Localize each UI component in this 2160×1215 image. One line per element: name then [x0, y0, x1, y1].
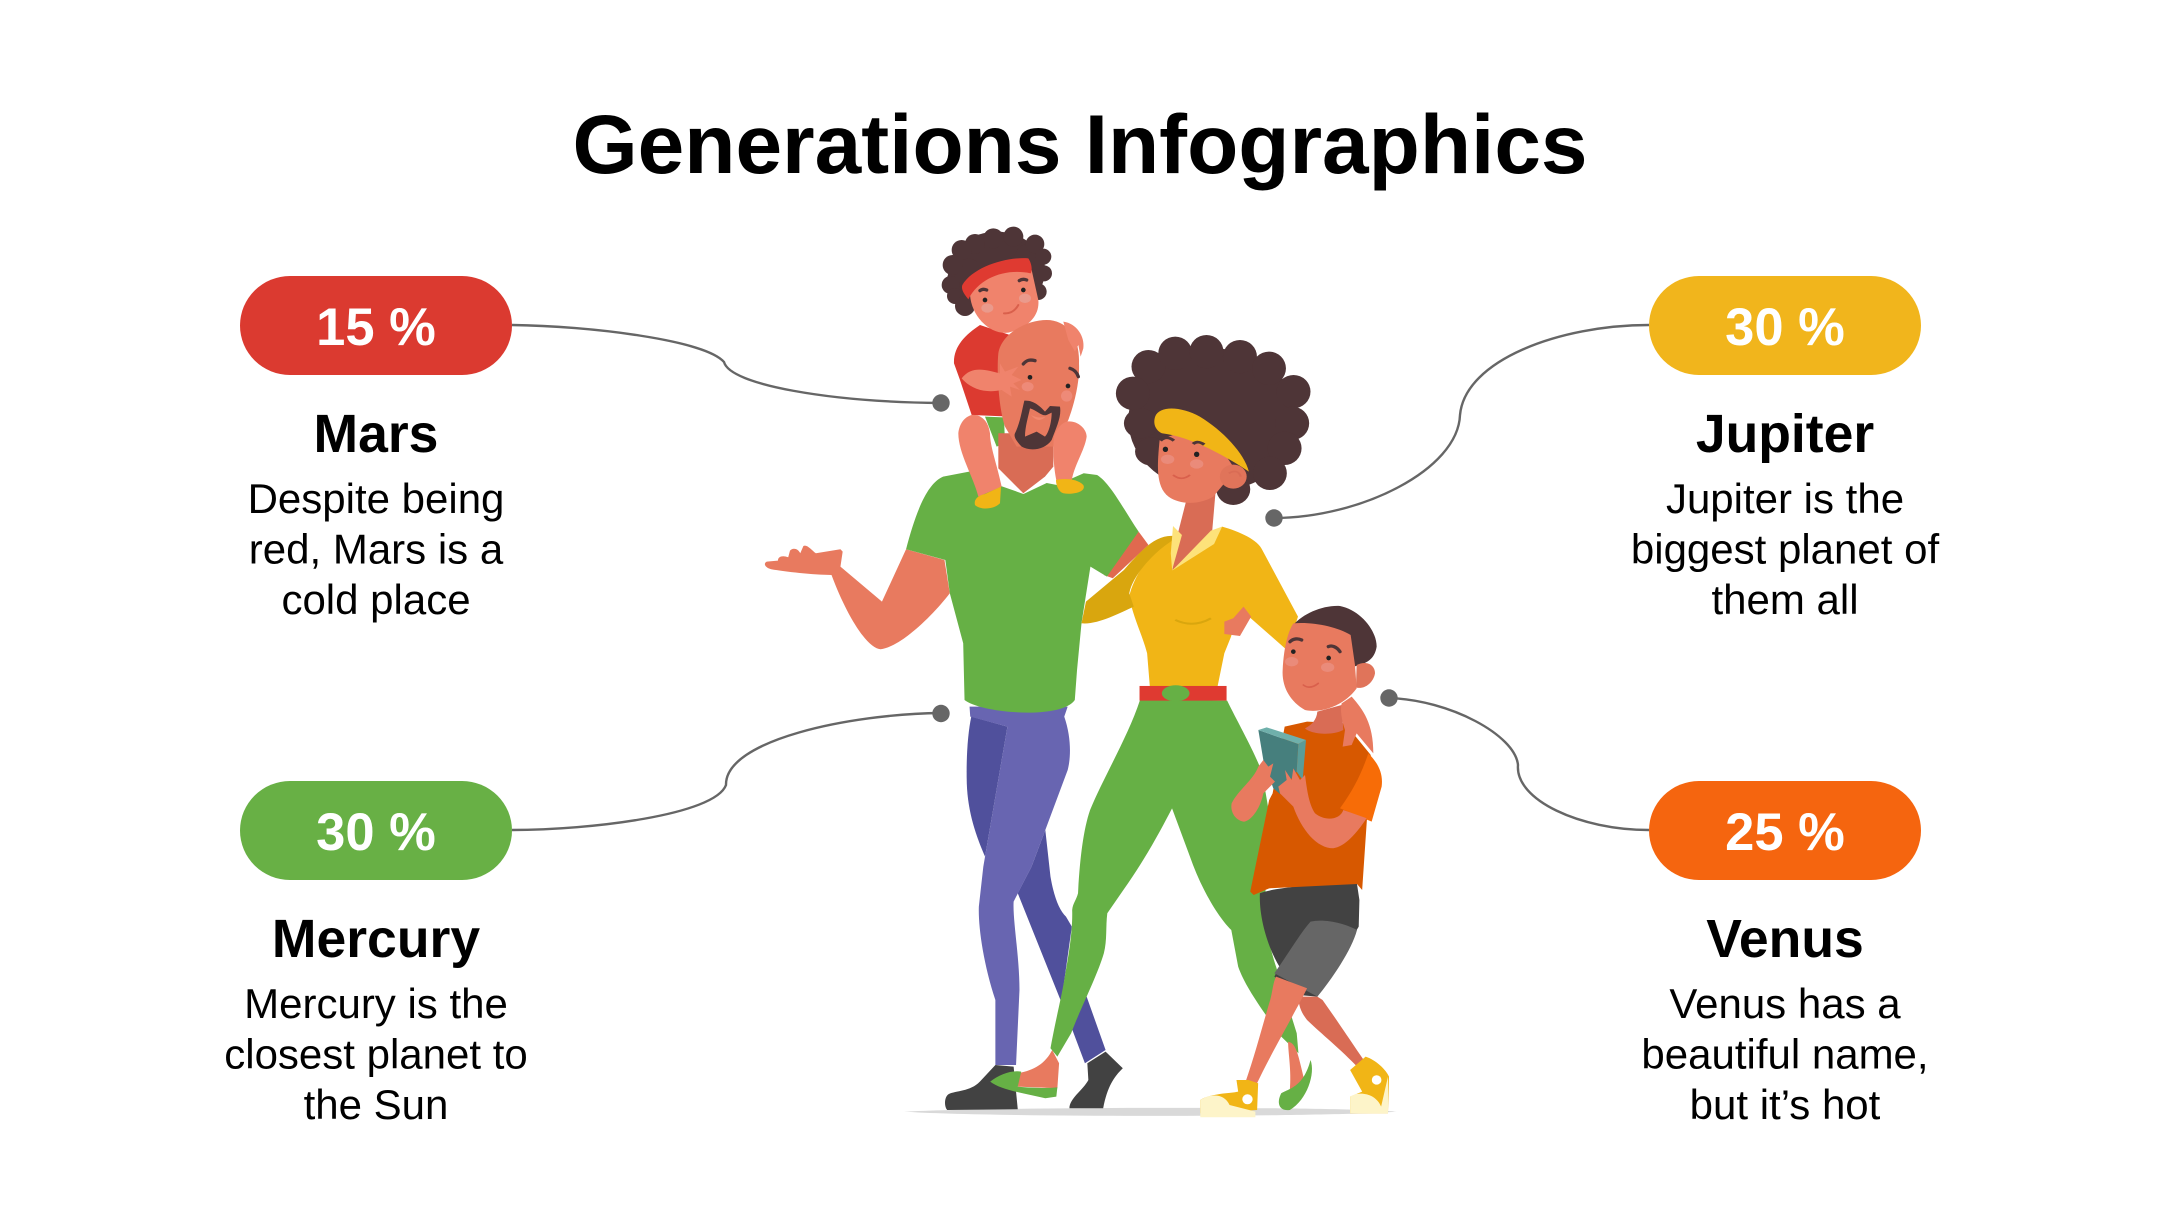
- description: Mars: Despite being: [248, 475, 504, 522]
- panel: Jupiter: [1265, 276, 1939, 623]
- father torso and arms: [765, 471, 1148, 713]
- percentage value: Mercury: 30 %: [316, 803, 436, 862]
- figure: mother: [990, 335, 1312, 1110]
- heading: Mars: Mars: [314, 405, 438, 464]
- connector dot: Mercury: [932, 705, 950, 722]
- boy arms: [1231, 760, 1367, 848]
- connector dot: Jupiter: [1265, 509, 1283, 527]
- description: Mars: cold place: [281, 576, 471, 623]
- title: Generations Infographics: [572, 97, 1588, 191]
- connector: Mars: [512, 325, 941, 403]
- figure: boy: [1200, 606, 1389, 1117]
- connector dot: Mars: [932, 394, 950, 412]
- description: Venus: but it’s hot: [1690, 1081, 1881, 1128]
- icon: book: [1258, 727, 1306, 794]
- figure: father body: [765, 471, 1148, 1110]
- heading: Jupiter: Jupiter: [1696, 405, 1874, 464]
- percentage value: Jupiter: 30 %: [1725, 298, 1845, 357]
- description: Jupiter: them all: [1711, 576, 1859, 623]
- child shoes: [975, 479, 1084, 509]
- child shirt: [954, 325, 1010, 417]
- boy sleeve: [1340, 753, 1382, 822]
- illustration: family: [765, 227, 1397, 1117]
- child arms and legs: [958, 322, 1087, 497]
- description: Mercury: closest planet to: [224, 1030, 528, 1078]
- connector: Jupiter: [1274, 325, 1649, 518]
- connector: Venus: [1389, 698, 1649, 830]
- description: Venus: beautiful name,: [1641, 1030, 1929, 1078]
- heading: Venus: Venus: [1706, 910, 1864, 969]
- description: Jupiter: biggest planet of: [1631, 526, 1939, 572]
- figure: father head with child on shoulders: [942, 227, 1087, 509]
- boy hair: [1293, 606, 1377, 667]
- percentage pill: Mars: [240, 276, 512, 375]
- boy lower body and shirt: [1200, 722, 1389, 1117]
- child face: [962, 258, 1038, 333]
- heading: Mercury: Mercury: [272, 910, 480, 969]
- percentage pill: Venus: [1649, 781, 1921, 880]
- panel: Venus: [1380, 689, 1929, 1128]
- percentage value: Venus: 25 %: [1725, 803, 1845, 862]
- mother legs and shoes: [990, 700, 1312, 1110]
- father legs and shoes: [945, 707, 1123, 1110]
- description: Mars: red, Mars is a: [249, 526, 504, 572]
- description: Mercury: Mercury is the: [244, 980, 508, 1027]
- percentage pill: Jupiter: [1649, 276, 1921, 375]
- boy face: [1283, 623, 1357, 711]
- boy neck: [1305, 705, 1343, 734]
- description: Jupiter: Jupiter is the: [1666, 475, 1904, 522]
- child hair: [942, 227, 1052, 316]
- father neck: [998, 433, 1053, 493]
- percentage value: Mars: 15 %: [316, 298, 436, 357]
- connector: Mercury: [512, 713, 941, 830]
- connector dot: Venus: [1380, 689, 1398, 707]
- ground shadow: [904, 1108, 1397, 1116]
- description: Mercury: the Sun: [304, 1081, 448, 1128]
- child shorts: [985, 417, 1005, 447]
- mother upper body: [1081, 335, 1310, 701]
- panel: Mercury: [224, 705, 950, 1128]
- panel: Mars: [240, 276, 950, 623]
- description: Venus: Venus has a: [1669, 980, 1901, 1027]
- mother's hand on boy's shoulder: [1341, 697, 1373, 753]
- percentage pill: Mercury: [240, 781, 512, 880]
- father head: [998, 320, 1079, 449]
- boy ear: [1356, 663, 1375, 688]
- boy head, arms and book: [1231, 606, 1382, 848]
